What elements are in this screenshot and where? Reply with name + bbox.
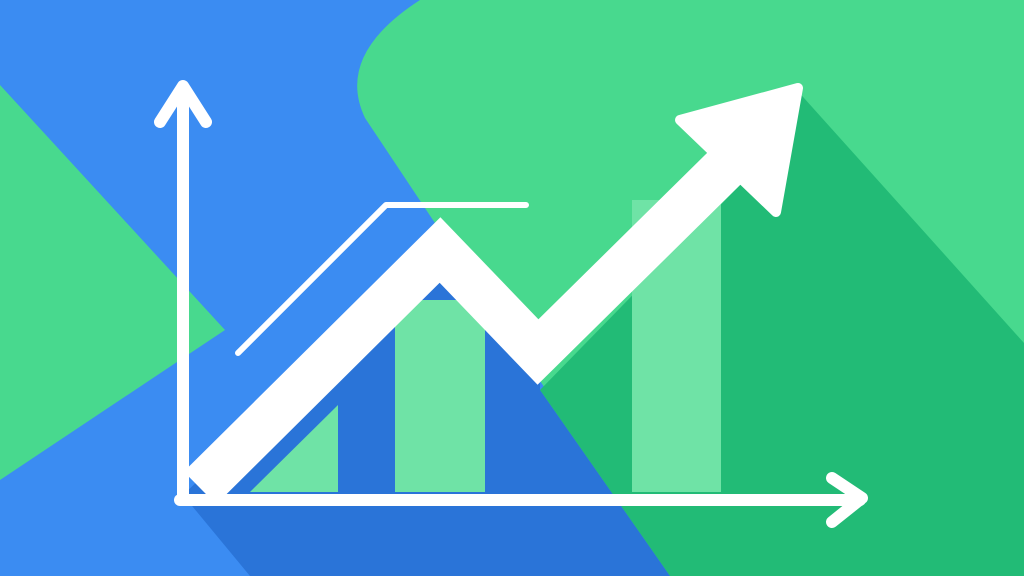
thin line — [238, 205, 526, 353]
green background region — [357, 0, 1024, 576]
axes — [160, 86, 862, 522]
left green triangle — [0, 85, 225, 480]
big arrow — [200, 138, 755, 488]
dark blue shadow — [183, 250, 670, 576]
dark green shadow — [540, 88, 1024, 576]
bars — [250, 200, 721, 492]
